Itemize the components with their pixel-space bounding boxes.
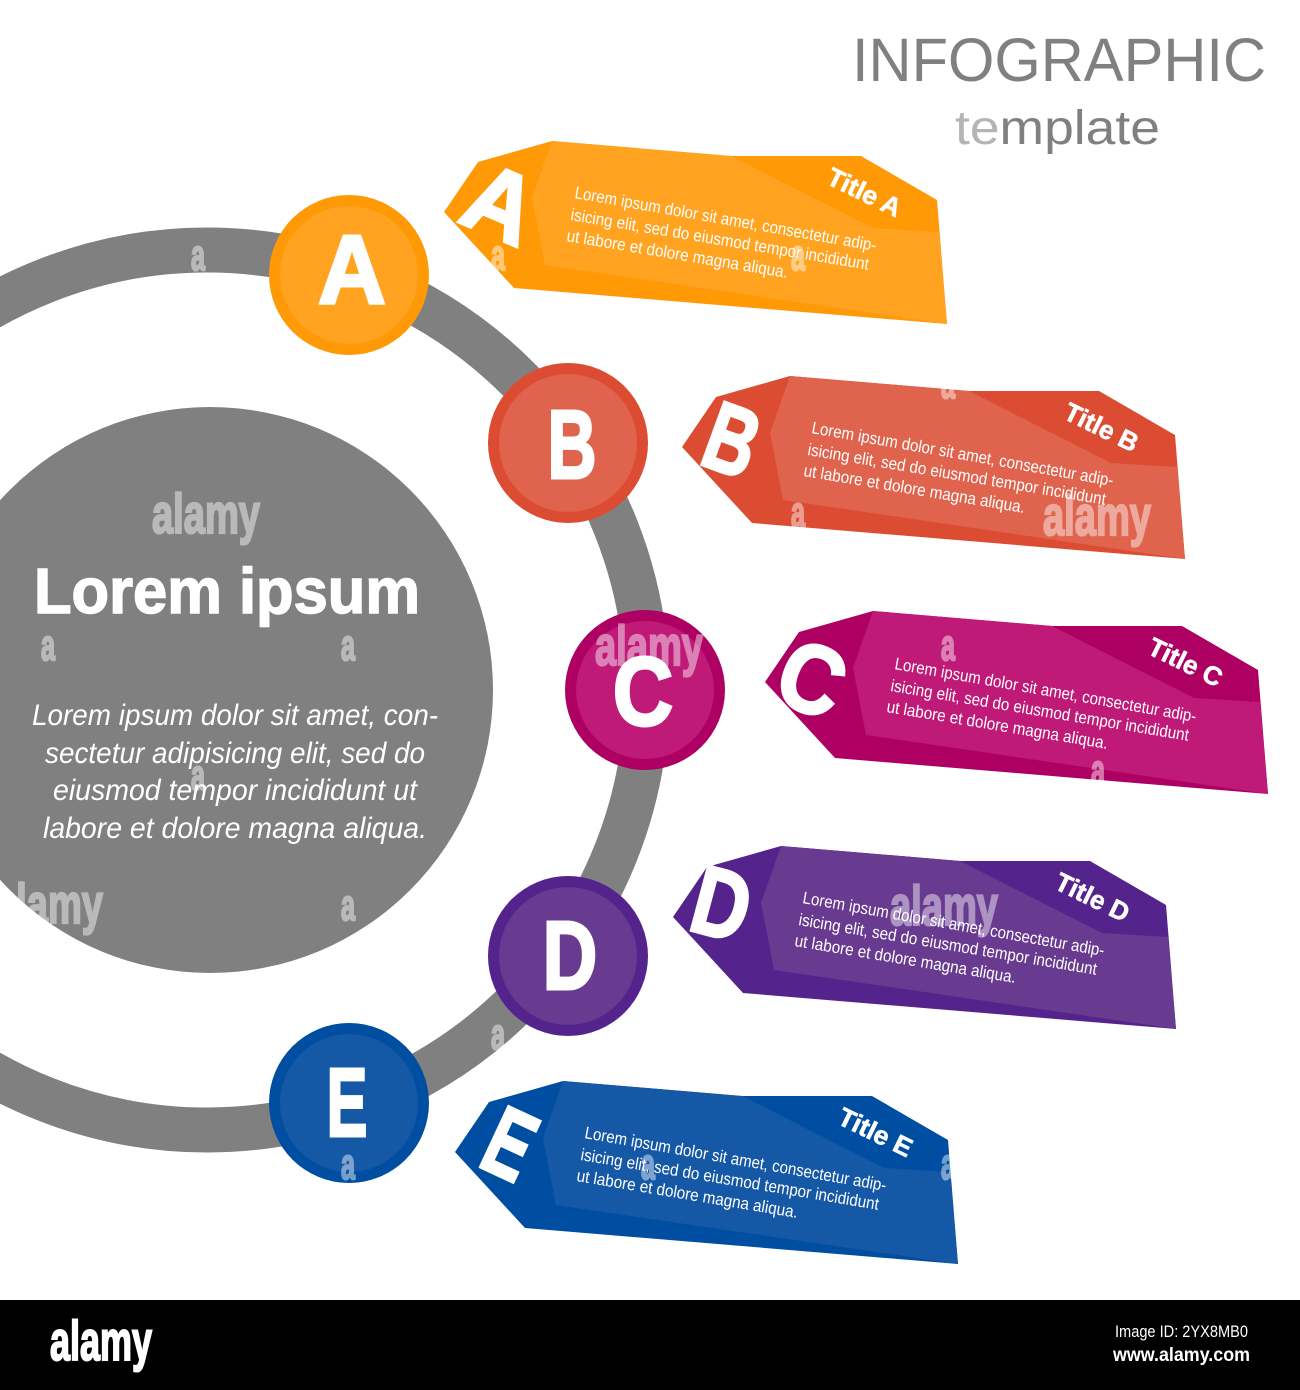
tag B: B (690, 380, 775, 500)
tag D: isicing elit, sed do eiusmod tempor incididunt (797, 910, 1099, 979)
tag A: A (448, 141, 553, 267)
tag B (682, 376, 1185, 559)
tag D: ut labore et dolore magna aliqua. (793, 931, 1017, 987)
watermarks: alamy (595, 614, 703, 677)
node B: B (547, 390, 597, 499)
watermarks: a (941, 359, 955, 408)
tag C (762, 611, 1268, 794)
tag C: C (762, 616, 862, 741)
footer bar: Image ID: 2YX8MB0 (1115, 1322, 1248, 1341)
tag E: isicing elit, sed do eiusmod tempor incididunt (579, 1145, 881, 1214)
tag B: Lorem ipsum dolor sit amet, consectetur adip- (810, 418, 1115, 490)
footer bar: www.alamy.com (1112, 1345, 1250, 1366)
node A: A (318, 217, 386, 324)
tag D: Title D (1050, 866, 1135, 928)
tag C: ut labore et dolore magna aliqua. (885, 697, 1109, 753)
watermarks: a (491, 231, 505, 280)
central body text: Lorem ipsum dolor sit amet, con- (32, 699, 438, 732)
central body text: eiusmod tempor incididunt ut (53, 774, 419, 807)
central body text: sectetur adipisicing elit, sed do (45, 737, 425, 770)
central circle background (0, 407, 493, 973)
page title: INFOGRAPHIC (852, 26, 1266, 94)
watermarks: a (41, 621, 55, 670)
node A (269, 195, 429, 355)
node D (488, 876, 648, 1036)
tag E: E (467, 1086, 553, 1203)
tag D: D (681, 844, 763, 964)
watermarks: a (341, 1140, 355, 1189)
tag B: isicing elit, sed do eiusmod tempor incididunt (806, 440, 1108, 509)
watermarks: a (191, 751, 205, 800)
tag E: Title E (833, 1101, 918, 1163)
watermarks: a (341, 621, 355, 670)
node C (565, 610, 725, 770)
central heading: Lorem ipsum (34, 555, 420, 627)
tag A: isicing elit, sed do eiusmod tempor incididunt (569, 205, 871, 274)
tag E: Lorem ipsum dolor sit amet, consectetur adip- (583, 1123, 888, 1195)
watermarks (0, 231, 1151, 1189)
node E: E (327, 1050, 367, 1158)
watermarks: a (641, 1140, 655, 1189)
node D: D (543, 902, 597, 1010)
watermarks: a (491, 1010, 505, 1059)
tag A: Lorem ipsum dolor sit amet, consectetur adip- (573, 183, 878, 255)
tag C: isicing elit, sed do eiusmod tempor incididunt (889, 676, 1191, 745)
watermarks: alamy (1043, 484, 1151, 547)
node C: C (613, 638, 673, 746)
central circle panel (0, 407, 493, 973)
tag E: ut labore et dolore magna aliqua. (575, 1166, 799, 1222)
page title (852, 26, 1266, 155)
node E (269, 1023, 429, 1183)
page title: template (955, 102, 1160, 155)
tag B: ut labore et dolore magna aliqua. (802, 461, 1026, 517)
watermarks: a (191, 231, 205, 280)
tag C: Title C (1143, 631, 1228, 693)
central body text (32, 699, 438, 845)
footer bar (0, 1300, 1300, 1390)
tag A: Title A (822, 161, 907, 223)
tag A: ut labore et dolore magna aliqua. (565, 226, 789, 282)
footer bar: alamy (50, 1309, 152, 1372)
watermarks: a (941, 621, 955, 670)
tag B: Title B (1059, 396, 1144, 458)
watermarks: alamy (152, 482, 260, 545)
tag E (455, 1081, 958, 1264)
tag A (444, 141, 947, 324)
watermarks: a (791, 231, 805, 280)
tag D: Lorem ipsum dolor sit amet, consectetur adip- (801, 888, 1106, 960)
watermarks: a (1091, 746, 1105, 795)
tag C: Lorem ipsum dolor sit amet, consectetur adip- (893, 654, 1198, 726)
watermarks: a (941, 1140, 955, 1189)
node B (488, 363, 648, 523)
watermarks: a (341, 881, 355, 930)
watermarks: a (791, 488, 805, 537)
central body text: labore et dolore magna aliqua. (43, 812, 427, 845)
watermarks: alamy (890, 874, 998, 937)
ring connecting the nodes (0, 250, 647, 1130)
tag D (673, 844, 1176, 1029)
